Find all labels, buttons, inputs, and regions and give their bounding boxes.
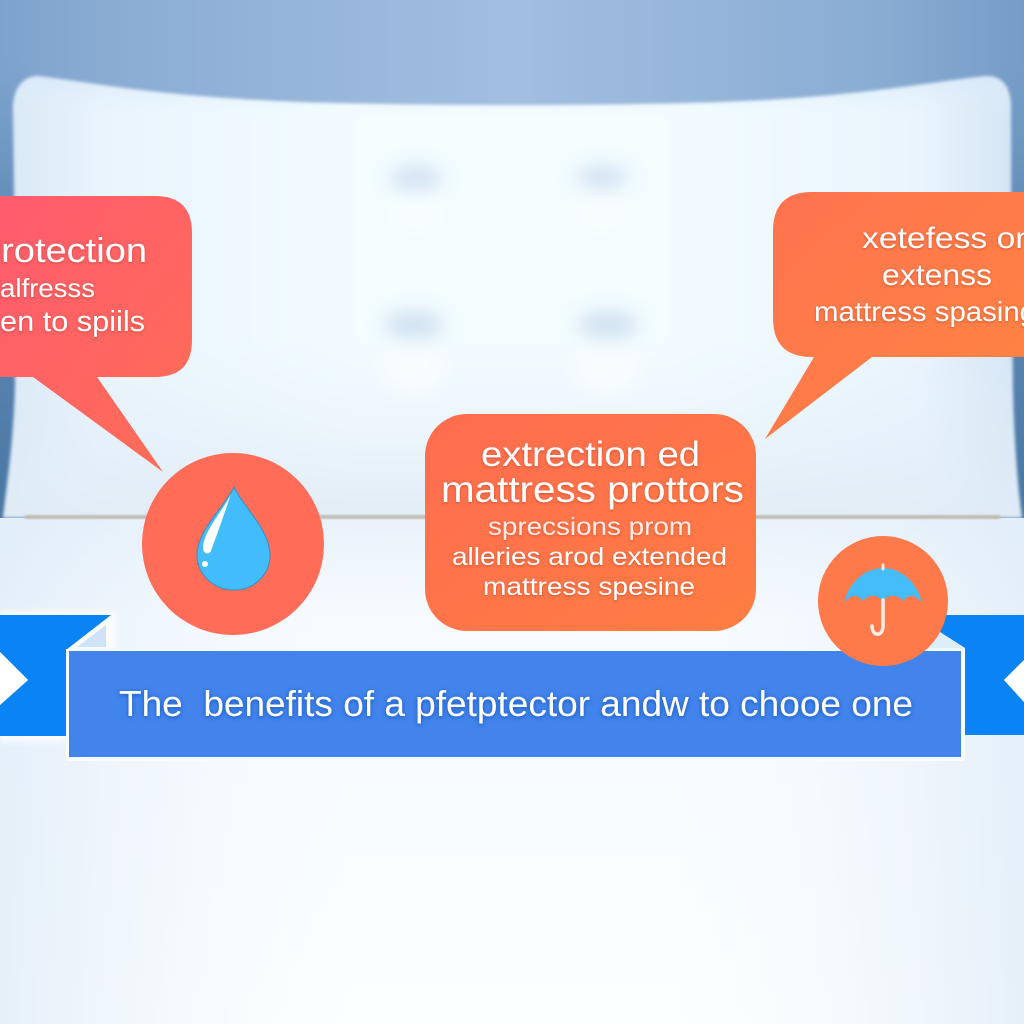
title text: The benefits of a pfetptector andw to chooe one [119, 683, 913, 724]
right speech bubble: extends mattress lifespan [765, 192, 1024, 439]
left bubble text: alfresss [0, 273, 95, 303]
background: wall behind the bed [0, 0, 1024, 530]
right bubble text [814, 222, 1024, 327]
left speech bubble: protection [0, 196, 192, 472]
center callout text: alleries arod extended [452, 543, 727, 571]
center callout text: mattress prottors [441, 469, 744, 510]
mattress surface [0, 515, 1024, 1024]
left bubble text: en to spiils [0, 306, 145, 338]
title banner [66, 649, 965, 761]
right bubble text: xetefess on [862, 222, 1024, 255]
center callout text [441, 435, 744, 601]
center callout text: sprecsions prom [488, 513, 692, 541]
left bubble text [0, 232, 147, 338]
right bubble text: mattress spasing [814, 296, 1024, 327]
center callout text: mattress spesine [483, 573, 695, 601]
right ribbon tail [925, 615, 1024, 735]
right bubble text: extenss [882, 259, 992, 292]
pillow with tufted dimples [0, 70, 1024, 520]
icon: umbrella in coral circle [818, 536, 948, 666]
icon: water drop in coral circle [142, 453, 324, 635]
left ribbon tail [0, 611, 116, 742]
center callout text: extrection ed [481, 435, 700, 474]
center callout panel [425, 414, 756, 631]
